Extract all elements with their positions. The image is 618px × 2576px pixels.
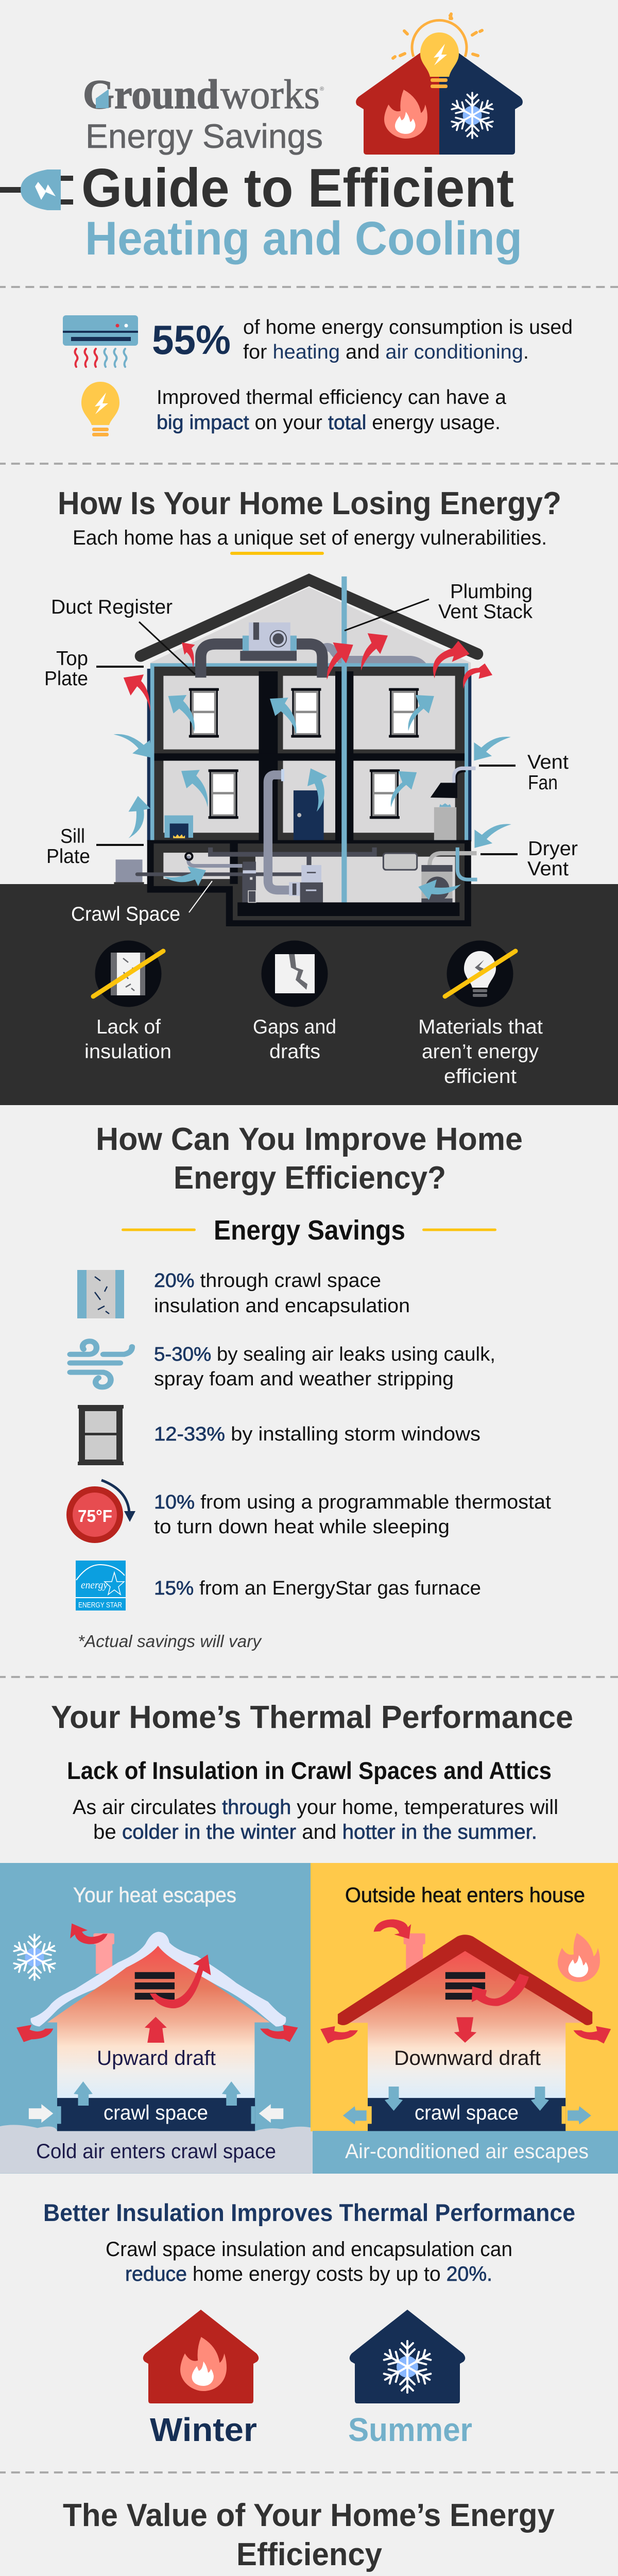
- text: 12-33% storm windows: 12-33% by installing storm windows: [154, 1423, 480, 1445]
- crawl space block: [368, 2098, 565, 2131]
- subheading: Energy Savings with yellow rules: Energy Savings: [214, 1215, 405, 1246]
- fireplace: [164, 816, 193, 838]
- label: crawl space winter: crawl space: [104, 2102, 208, 2124]
- text: Lack of insulation: Lack of: [96, 1016, 161, 1038]
- text: Materials that aren't energy efficient: efficient: [444, 1065, 517, 1088]
- snow on roof: [30, 1931, 286, 2026]
- roof: [338, 1935, 592, 2025]
- red heat arrows: [320, 1919, 611, 2043]
- label: Outside heat enters house: Outside heat enters house: [345, 1883, 585, 1907]
- text: reduce home energy costs: Crawl space insulation and encapsulation can: [106, 2238, 512, 2261]
- windows: [189, 688, 419, 819]
- text: Materials that aren't energy efficient: aren’t energy: [422, 1041, 539, 1063]
- text: Gaps and drafts: [253, 1016, 336, 1063]
- crawl space foundation: [147, 840, 471, 926]
- text: improved thermal efficiency: Improved thermal efficiency can have a: [157, 386, 506, 409]
- text: 20% through crawl space: [154, 1270, 410, 1317]
- text: home energy consumption: for heating and air conditioning.: [243, 341, 529, 363]
- text: 10% programmable thermostat: 10% from using a programmable thermostat: [154, 1492, 551, 1513]
- house body with gradient: [349, 1951, 582, 2098]
- text: 20% through crawl space: 20% through crawl space: [154, 1270, 381, 1292]
- label: Vent Fan: Fan: [528, 772, 558, 794]
- icon: crawl space insulation: [77, 1270, 124, 1318]
- outdoor condenser unit: [114, 859, 144, 885]
- label: Sill Plate: Sill: [60, 825, 85, 848]
- icon: Energy Star logo: energy: [81, 1579, 108, 1591]
- red heat arrows: [16, 1923, 298, 2043]
- text: air circulates: As air circulates through your home, temperatures will: [73, 1796, 558, 1819]
- text: 5-30% sealing air leaks: spray foam and weather stripping: [154, 1368, 454, 1390]
- text: Lack of insulation: [84, 1016, 171, 1063]
- text: Materials that aren't energy efficient: [418, 1016, 543, 1088]
- label: Your heat escapes: Your heat escapes: [73, 1883, 236, 1907]
- title: Guide to Efficient: Guide to Efficient: [81, 158, 514, 218]
- white inflow arrows: [29, 2104, 283, 2123]
- text: 10% programmable thermostat: to turn down heat while sleeping: [154, 1516, 450, 1538]
- icon: storm window: [78, 1405, 124, 1465]
- subheading: Better Insulation Improves Thermal Performance: Better Insulation Improves Thermal Performance: [43, 2199, 575, 2226]
- icon: summer house with snowflake: [350, 2310, 465, 2403]
- text: air circulates: [73, 1796, 558, 1843]
- panel: summer heat enters: [311, 1863, 618, 2174]
- blue arrows: [343, 2087, 591, 2125]
- text: home energy consumption: of home energy consumption is used: [243, 316, 573, 338]
- label: Winter: Winter: [150, 2411, 257, 2448]
- label: crawl space summer: crawl space: [415, 2102, 519, 2124]
- text: improved thermal efficiency: [157, 386, 506, 434]
- label: Plumbing Vent Stack: [438, 581, 533, 623]
- label: Top Plate: [44, 648, 88, 690]
- label: Crawl Space: Crawl Space: [71, 903, 180, 925]
- text: 10% programmable thermostat: [154, 1492, 551, 1538]
- label: Upward draft: Upward draft: [97, 2047, 216, 2070]
- title: Energy Savings: Energy Savings: [85, 117, 323, 155]
- icon: electrical plug: [0, 170, 73, 210]
- label: Plumbing Vent Stack: Plumbing: [450, 581, 533, 603]
- attic vent: [445, 1972, 485, 1999]
- arrows: heat escaping: [124, 633, 492, 712]
- text: air circulates: be colder in the winter and hotter in the summer.: [93, 1821, 537, 1843]
- label: Top Plate: Plate: [44, 668, 88, 690]
- text: home energy consumption: [243, 316, 573, 363]
- chimney: [404, 1934, 425, 1970]
- label: Plumbing Vent Stack: Vent Stack: [438, 601, 533, 623]
- text: Materials that aren't energy efficient: Materials that: [418, 1016, 543, 1038]
- snow ground: [0, 2125, 313, 2174]
- yellow underline accent: [230, 552, 324, 555]
- icon: thermostat 75°F: [66, 1480, 135, 1543]
- label: Air-conditioned air escapes: Air-conditioned air escapes: [345, 2140, 589, 2163]
- subheading: unique set of vulnerabilities: Each home has a unique set of energy vulnerabilities.: [73, 527, 547, 549]
- house body with gradient: [47, 1946, 270, 2098]
- heading: The Value of Your Home's Energy Efficiency: [63, 2498, 555, 2572]
- kitchen stove and vent fan: [431, 768, 475, 840]
- heading: How Can You Improve Home Energy Efficiency?: Energy Efficiency?: [174, 1160, 446, 1196]
- icon: house split between heating and cooling with lightbulb: [356, 14, 523, 155]
- label: Duct Register: Duct Register: [51, 596, 173, 618]
- icon: Energy Star logo: [76, 1561, 126, 1611]
- washer and dryer vent: [383, 848, 477, 903]
- header logo: Groundworks: ®: [320, 86, 324, 92]
- footnote: actual savings will vary: *Actual savings will vary: [78, 1632, 263, 1651]
- header logo: Groundworks: Ground: [83, 72, 219, 117]
- icon: flame on summer panel: [558, 1933, 600, 1982]
- label: Vent Fan: Vent: [527, 751, 569, 773]
- heading: The Value of Your Home's Energy Efficiency: The Value of Your Home’s Energy: [63, 2498, 555, 2533]
- text: Lack of insulation: insulation: [84, 1041, 171, 1063]
- label: Cold air enters crawl space: Cold air enters crawl space: [36, 2140, 276, 2163]
- chimney: [93, 1934, 114, 1974]
- icon: Energy Star logo: ENERGY STAR: [78, 1601, 122, 1609]
- dark ground band: [0, 884, 618, 1105]
- icon: light bulb: [81, 382, 119, 436]
- label: Sill Plate: [46, 825, 90, 868]
- header logo: Groundworks: works: [220, 72, 320, 117]
- label: Dryer Vent: Vent: [527, 858, 569, 880]
- text: Gaps and drafts: Gaps and: [253, 1016, 336, 1038]
- icon: winter house with flame: [143, 2310, 259, 2403]
- diagram: house cross-section: [113, 577, 511, 926]
- heading: How Is Your Home Losing Energy?: How Is Your Home Losing Energy?: [58, 486, 561, 521]
- text: reduce home energy costs: [106, 2238, 512, 2285]
- leader lines for house labels: [96, 599, 518, 912]
- attic vent: [135, 1972, 175, 1999]
- label: Dryer Vent: [527, 838, 578, 880]
- icon: thermostat 75°F: 75°F: [78, 1506, 112, 1526]
- label: Dryer Vent: Dryer: [528, 838, 578, 860]
- heading: How Can You Improve Home Energy Efficiency?: [96, 1122, 523, 1196]
- subheading: Lack of Insulation in Crawl Spaces and Attics: Lack of Insulation in Crawl Spaces and Attics: [67, 1757, 552, 1784]
- stat: 55%: 55%: [152, 317, 231, 363]
- heading: How Can You Improve Home Energy Efficiency?: How Can You Improve Home: [96, 1122, 523, 1157]
- text: 5-30% sealing air leaks: 5-30% by sealing air leaks using caulk,: [154, 1344, 495, 1365]
- subheading: Energy Savings with yellow rules: [122, 1215, 496, 1246]
- text: 15% EnergyStar gas furnace: 15% from an EnergyStar gas furnace: [154, 1578, 481, 1599]
- icon: air conditioner with heat waves: [63, 315, 138, 367]
- text: 5-30% sealing air leaks: [154, 1344, 495, 1390]
- text: improved thermal efficiency: big impact on your total energy usage.: [157, 412, 501, 434]
- text: 20% through crawl space: insulation and encapsulation: [154, 1295, 410, 1317]
- panel: winter heat escapes: [0, 1863, 313, 2174]
- header logo: Groundworks: [83, 72, 324, 117]
- arrows: cold air entering: [113, 695, 511, 900]
- blue up arrows: [74, 2081, 241, 2106]
- plumbing vent stack: [341, 577, 347, 903]
- icon: snowflake on winter panel: [12, 1935, 57, 1980]
- icon: inefficient materials bulb: [445, 941, 516, 1007]
- furnace and water heater: [242, 769, 323, 903]
- label: Downward draft: Downward draft: [394, 2047, 541, 2070]
- icon: wind / air leaks: [70, 1341, 132, 1387]
- icon: lack of insulation: [93, 941, 163, 1007]
- door: [294, 790, 324, 840]
- crawl space block: [57, 2098, 255, 2131]
- text: Gaps and drafts: drafts: [269, 1041, 320, 1063]
- text: reduce home energy costs: reduce home energy costs by up to 20%.: [125, 2263, 492, 2285]
- label: Sill Plate: Plate: [46, 845, 90, 868]
- label: Summer: Summer: [348, 2411, 472, 2448]
- attic HVAC ducts and unit: [201, 622, 322, 677]
- refrigerant pipes: [137, 853, 301, 874]
- label: Vent Fan: [527, 751, 569, 794]
- heading: The Value of Your Home's Energy Efficiency: Efficiency: [236, 2537, 382, 2572]
- title: Heating and Cooling: Heating and Cooling: [85, 212, 522, 265]
- heading: Your Home's Thermal Performance: Your Home’s Thermal Performance: [51, 1700, 573, 1735]
- label: Top Plate: Top: [56, 648, 88, 670]
- icon: gaps and drafts: [262, 941, 328, 1007]
